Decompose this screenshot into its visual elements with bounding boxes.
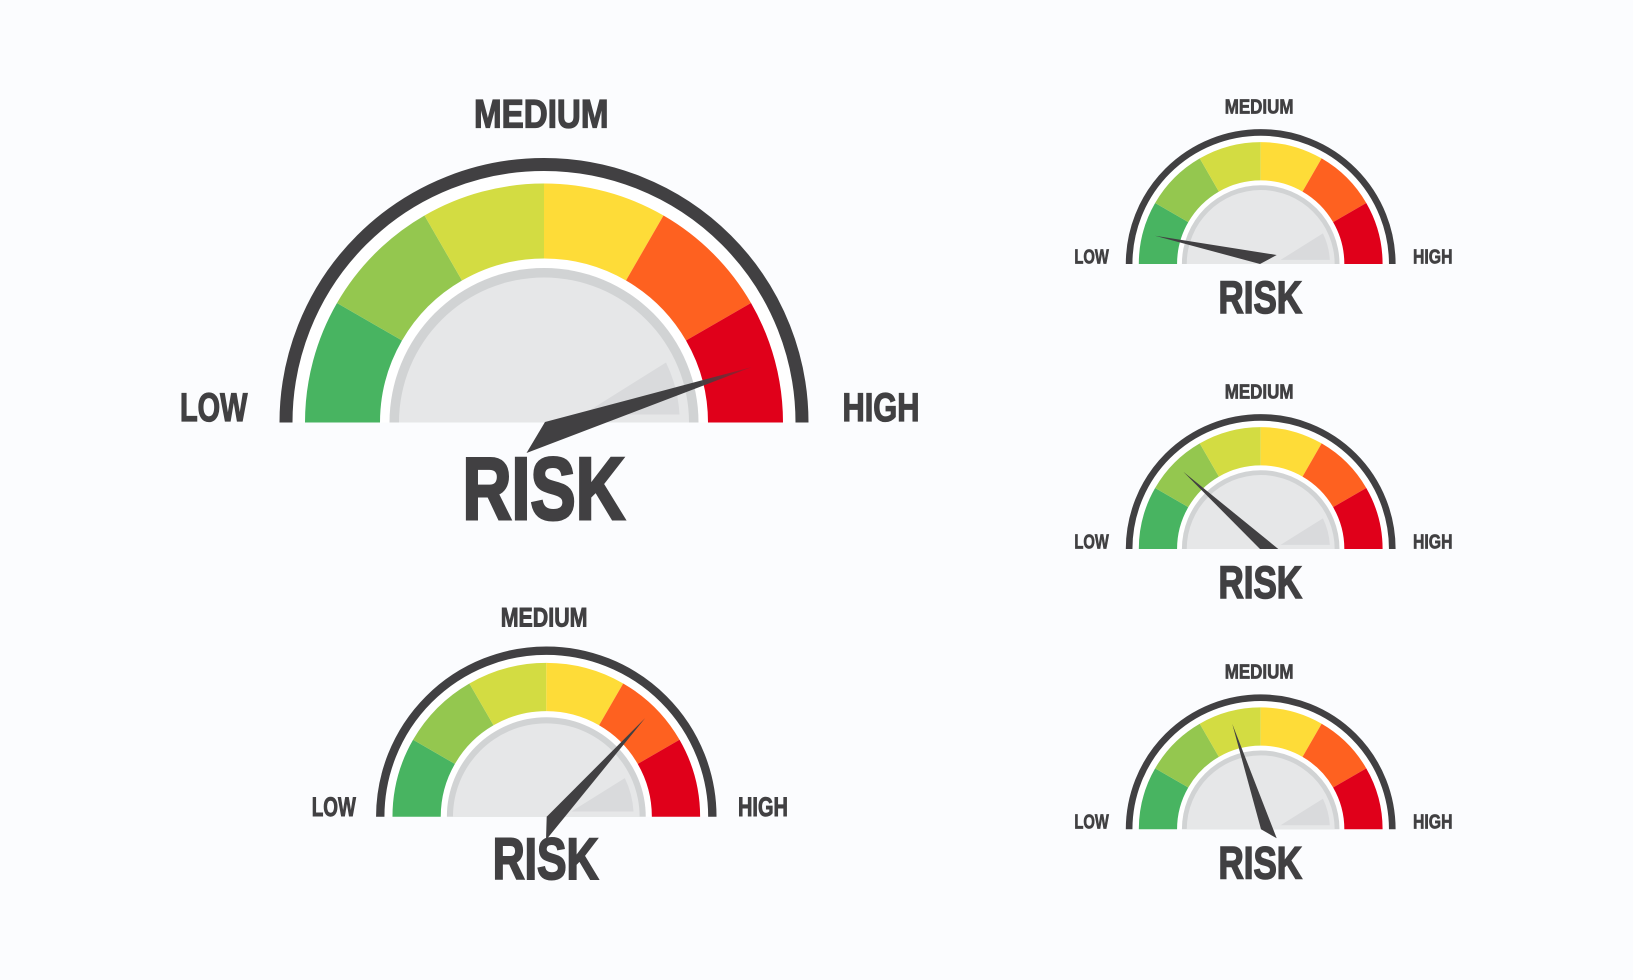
gauge: bottom-right risk meter [1074,662,1452,889]
gauge: middle-right risk meter [1074,382,1452,608]
needle: medium [1232,724,1277,838]
label: high: HIGH [738,792,788,822]
needle: high [526,367,752,453]
label: risk: RISK [1218,838,1302,889]
dial: middle-right [1129,417,1392,549]
label: medium: MEDIUM [1225,96,1294,118]
needle: low-medium [1183,472,1278,549]
label: risk: RISK [1218,557,1302,608]
label: low: LOW [1074,246,1110,268]
label: high: HIGH [1413,246,1452,268]
dial: bottom-right [1129,698,1392,829]
label: medium: MEDIUM [501,603,588,633]
label: low: LOW [312,792,356,822]
dial: bottom-centre [380,651,712,817]
label: risk: RISK [462,439,625,538]
gauge: bottom-centre risk meter [312,603,788,892]
label: risk: RISK [1218,272,1302,323]
label: low: LOW [180,386,248,430]
label: high: HIGH [842,386,920,430]
label: low: LOW [1074,812,1110,834]
dial: top-right [1129,132,1392,264]
label: medium: MEDIUM [1225,662,1294,684]
label: medium: MEDIUM [474,93,608,137]
label: high: HIGH [1413,532,1452,554]
gauge: top-right risk meter [1074,96,1452,323]
gauge: large risk meter [180,93,920,538]
label: risk: RISK [493,827,599,892]
dial: large [286,164,802,422]
needle: medium-high [546,718,645,840]
label: low: LOW [1074,532,1110,554]
label: high: HIGH [1413,812,1452,834]
needle: low [1155,236,1277,264]
label: medium: MEDIUM [1225,382,1294,404]
